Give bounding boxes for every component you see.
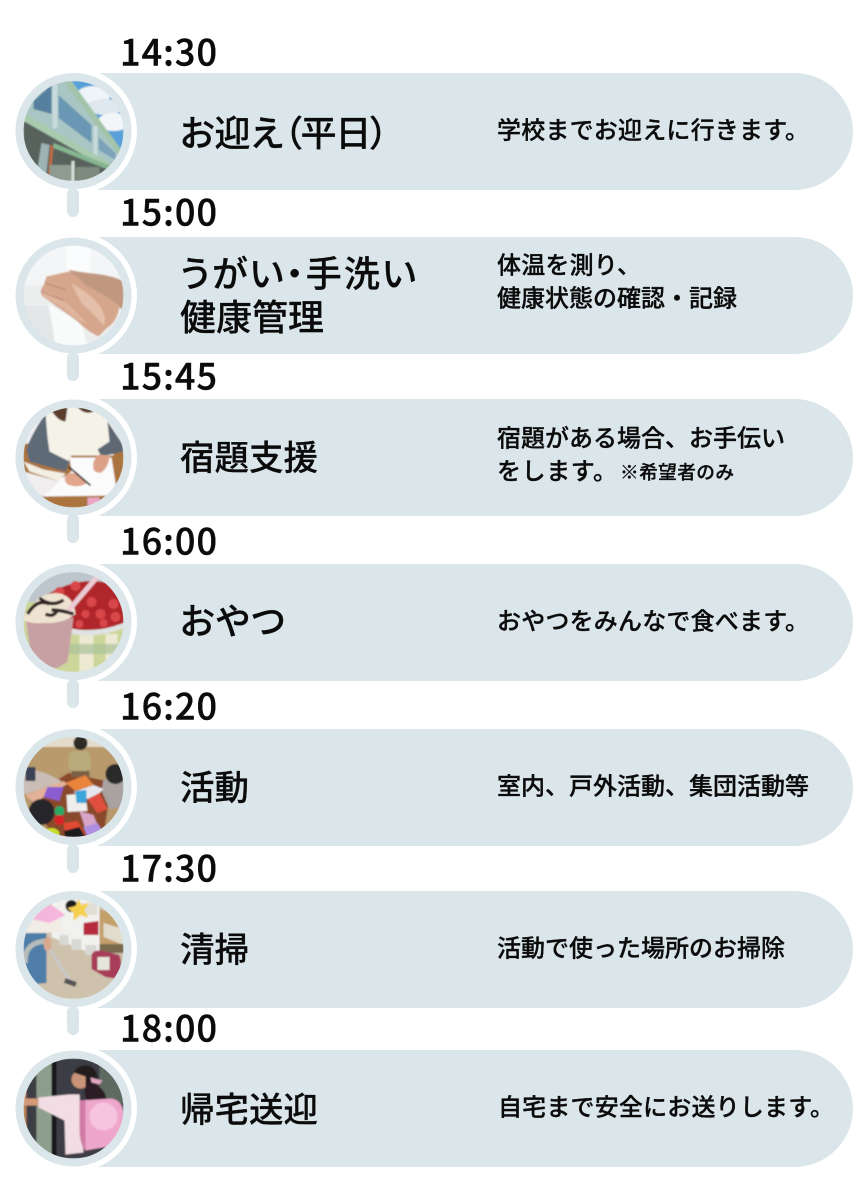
description: 学校までお迎えに行きます。	[497, 110, 809, 146]
icon: hand washing photo	[24, 246, 124, 346]
time label 14:30: 14:30	[120, 25, 217, 77]
title line 2: 健康管理	[180, 289, 324, 341]
time label 16:20: 16:20	[120, 679, 217, 731]
activity bar	[73, 891, 853, 1008]
photo frame	[10, 886, 137, 1012]
icon: homework photo	[24, 408, 124, 508]
connector: 15:45 to 16:00	[67, 514, 79, 543]
title: 宿題支援	[180, 430, 318, 480]
activity bar	[73, 1050, 853, 1167]
icon: school building photo	[24, 81, 130, 181]
note: hope-based: ※希望者のみ	[620, 458, 734, 485]
title: おやつ	[180, 593, 285, 645]
time label 15:45: 15:45	[120, 349, 217, 401]
description line 1: 体温を測り、	[497, 246, 641, 280]
activity bar	[73, 564, 853, 681]
photo frame	[10, 232, 137, 359]
row 2: gargle and hand washing	[16, 198, 853, 354]
description line 2: 健康状態の確認・記録	[497, 278, 737, 314]
icon: cleaning photo	[24, 899, 124, 999]
title: 帰宅送迎	[180, 1082, 318, 1132]
connector: 14:30 to 15:00	[67, 188, 79, 217]
row 5: activities	[16, 692, 853, 846]
activity bar	[73, 399, 853, 516]
photo frame	[10, 68, 137, 194]
time label 15:00: 15:00	[120, 185, 217, 237]
photo frame	[10, 558, 137, 686]
title line 1: うがい・手洗い	[180, 246, 416, 298]
row 1: pick-up	[16, 38, 853, 190]
activity bar	[73, 237, 853, 354]
icon: snack photo	[24, 572, 124, 672]
connector: 16:20 to 17:30	[67, 844, 79, 873]
activity bar	[73, 73, 853, 190]
time label 17:30: 17:30	[120, 841, 217, 893]
description: 自宅まで安全にお送りします。	[498, 1088, 834, 1122]
connector: 17:30 to 18:00	[67, 1006, 79, 1035]
description line 1: 宿題がある場合、お手伝い	[497, 418, 785, 454]
title: parenthetical: （平日）	[284, 105, 388, 157]
time label 16:00: 16:00	[120, 514, 217, 566]
row 6: cleaning	[16, 854, 853, 1008]
description: おやつをみんなで食べます。	[497, 602, 809, 636]
title: 活動	[180, 760, 249, 810]
description line 2: をします。	[497, 452, 617, 486]
title: お迎え	[180, 105, 283, 157]
photo frame	[10, 724, 137, 850]
time label 18:00: 18:00	[120, 1001, 217, 1053]
icon: child going home photo	[24, 1058, 124, 1158]
row 4: snack	[16, 527, 853, 681]
description: 室内、戸外活動、集団活動等	[497, 766, 809, 802]
connector: 15:00 to 15:45	[67, 352, 79, 381]
description: 活動で使った場所のお掃除	[497, 928, 785, 964]
activity bar	[73, 729, 853, 846]
photo frame	[10, 1045, 137, 1172]
row 3: homework support	[16, 362, 853, 516]
title: 清掃	[180, 922, 249, 972]
icon: group activity photo	[24, 736, 126, 840]
photo frame	[10, 394, 137, 521]
connector: 16:00 to 16:20	[67, 679, 79, 708]
row 7: going home	[16, 1014, 853, 1167]
